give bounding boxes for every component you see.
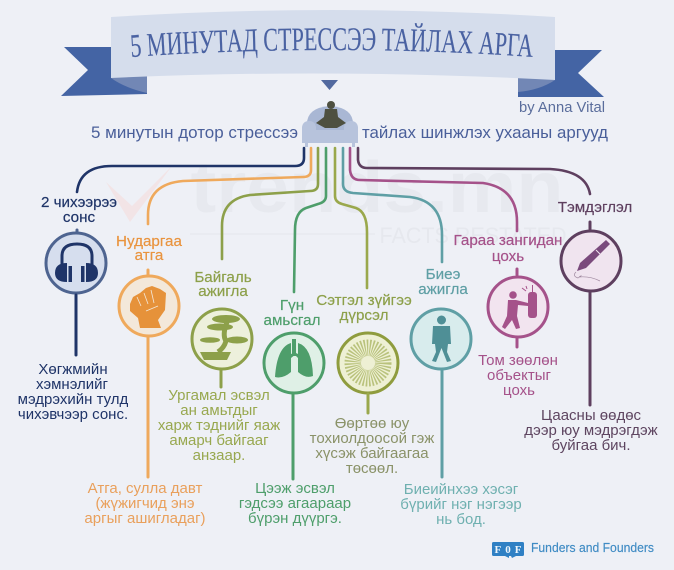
subtitle: [91, 123, 608, 142]
description: буйгаа бич.: [551, 437, 631, 454]
title banner: [61, 10, 604, 97]
arrow down: [321, 80, 338, 90]
description: [158, 387, 280, 464]
panel: headphones: [18, 148, 304, 423]
description: гэдсээ агаараар: [239, 495, 351, 512]
connector: [358, 148, 590, 194]
heading: цохь: [492, 248, 524, 265]
description: Ургамал эсвэл: [168, 387, 270, 404]
connector: [77, 148, 304, 192]
description: аргыг ашигладаг): [84, 510, 206, 527]
stem: [516, 269, 518, 275]
icon: pen: [561, 231, 621, 291]
subtitle: тайлах шинжлэх ухааны аргууд: [362, 123, 608, 142]
icon: boxer and punching bag: [488, 277, 548, 337]
description: цохь: [503, 382, 535, 399]
description: Том зөөлөн: [478, 352, 558, 369]
connector: [335, 148, 367, 288]
banner left tail: [61, 47, 147, 96]
stem below: [74, 295, 78, 355]
heading: Байгаль: [194, 269, 252, 286]
description: Өөртөө юу: [335, 415, 410, 432]
heading: Тэмдэглэл: [558, 199, 632, 216]
icon: bonsai tree: [192, 309, 252, 369]
stem below: [366, 394, 370, 413]
logo text: Funders and Founders: [531, 540, 654, 555]
description: [239, 480, 351, 527]
description: бүрийг нэг нэгээр: [400, 496, 522, 513]
heading: [454, 232, 562, 265]
heading: дүрсэл: [340, 307, 388, 324]
stem below: [588, 292, 592, 405]
watermark: FACTS RESTATED: [380, 223, 566, 248]
description: [310, 415, 434, 477]
title: 5 МИНУТАД СТРЕССЭЭ ТАЙЛАХ АРГА: [131, 23, 533, 58]
connector: [222, 148, 318, 259]
description: Атга, сулла давт: [88, 480, 202, 497]
heading: сонс: [63, 209, 95, 226]
heading: [41, 194, 117, 226]
heading: Гараа зангидан: [454, 232, 562, 249]
connector: [294, 148, 326, 292]
icon: fist: [119, 276, 179, 336]
heading: Гүн: [280, 297, 304, 314]
stem: [76, 230, 78, 233]
heading: амьсгал: [264, 312, 320, 329]
description: Хөгжмийн: [38, 361, 108, 378]
description: харж тэднийг яаж: [158, 417, 280, 434]
description: [478, 352, 558, 399]
description: нь бод.: [436, 511, 486, 528]
icon: headphones: [46, 233, 106, 293]
heading: Сэтгэл зүйгээ: [316, 292, 412, 309]
panel: journaling: [358, 148, 658, 454]
description: чихэвчээр сонс.: [18, 406, 128, 423]
connector: [350, 148, 517, 231]
panel: deep breathing: [239, 148, 351, 527]
icon: sunburst: [338, 333, 398, 393]
description: мэдрэхийн тулд: [18, 391, 129, 408]
panel: observe nature: [158, 148, 318, 464]
heading: [316, 292, 412, 324]
description: хэмнэлийг: [36, 376, 109, 393]
stem: [588, 222, 592, 229]
panel: punch: [350, 148, 562, 399]
stem below: [146, 337, 150, 477]
panel: visualize: [310, 148, 434, 477]
description: бүрэн дүүргэ.: [248, 510, 342, 527]
subtitle: 5 минутын дотор стрессээ: [91, 123, 298, 142]
panel: clench fist: [84, 148, 311, 527]
description: Цээж эсвэл: [255, 480, 335, 497]
banner folds: [111, 74, 555, 93]
watermark: trends.mn: [190, 148, 564, 228]
description: төсөөл.: [346, 460, 398, 477]
description: [400, 481, 522, 528]
banner right tail: [518, 50, 604, 97]
logo mark: [492, 542, 524, 558]
description: объектыг: [487, 367, 552, 384]
heading: 2 чихээрээ: [41, 194, 117, 211]
heading: ажигла: [418, 281, 468, 298]
description: [18, 361, 129, 423]
stem below: [220, 370, 222, 387]
heading: [264, 297, 320, 329]
stem: [146, 270, 150, 275]
panel: body scan: [343, 148, 522, 528]
icon: standing person: [411, 309, 471, 369]
logo mark: F0F: [494, 544, 522, 556]
description: Цаасны өөдөс: [541, 407, 642, 424]
heading: Нударгаа: [116, 233, 183, 250]
description: анзаар.: [193, 447, 245, 464]
description: ан амьтдыг: [180, 402, 258, 419]
description: (жүжигчид энэ: [95, 495, 195, 512]
heading: [194, 269, 252, 300]
description: [84, 480, 206, 527]
heading: Биеэ: [426, 266, 461, 283]
stem below: [292, 394, 294, 479]
banner ribbon: [111, 10, 555, 80]
icon: person meditating on sofa: [302, 101, 358, 147]
description: амарч байгааг: [169, 432, 269, 449]
watermark: [106, 148, 566, 248]
connector: [148, 148, 311, 224]
description: Биеийнхээ хэсэг: [404, 481, 519, 498]
description: хүсэж байгаагаа: [315, 445, 429, 462]
connector: [343, 148, 442, 262]
heading: [116, 233, 183, 264]
description: дээр юу мэдрэгдэж: [524, 422, 658, 439]
icon: lungs: [264, 333, 324, 393]
byline: by Anna Vital: [519, 100, 605, 116]
heading: ажигла: [198, 283, 248, 300]
description: [524, 407, 658, 454]
description: тохиолдоосой гэж: [310, 430, 434, 447]
logo: Funders and Founders: [492, 540, 654, 558]
heading: атга: [135, 247, 164, 264]
heading: [418, 266, 468, 298]
stem below: [440, 370, 444, 477]
stem below: [516, 338, 518, 347]
